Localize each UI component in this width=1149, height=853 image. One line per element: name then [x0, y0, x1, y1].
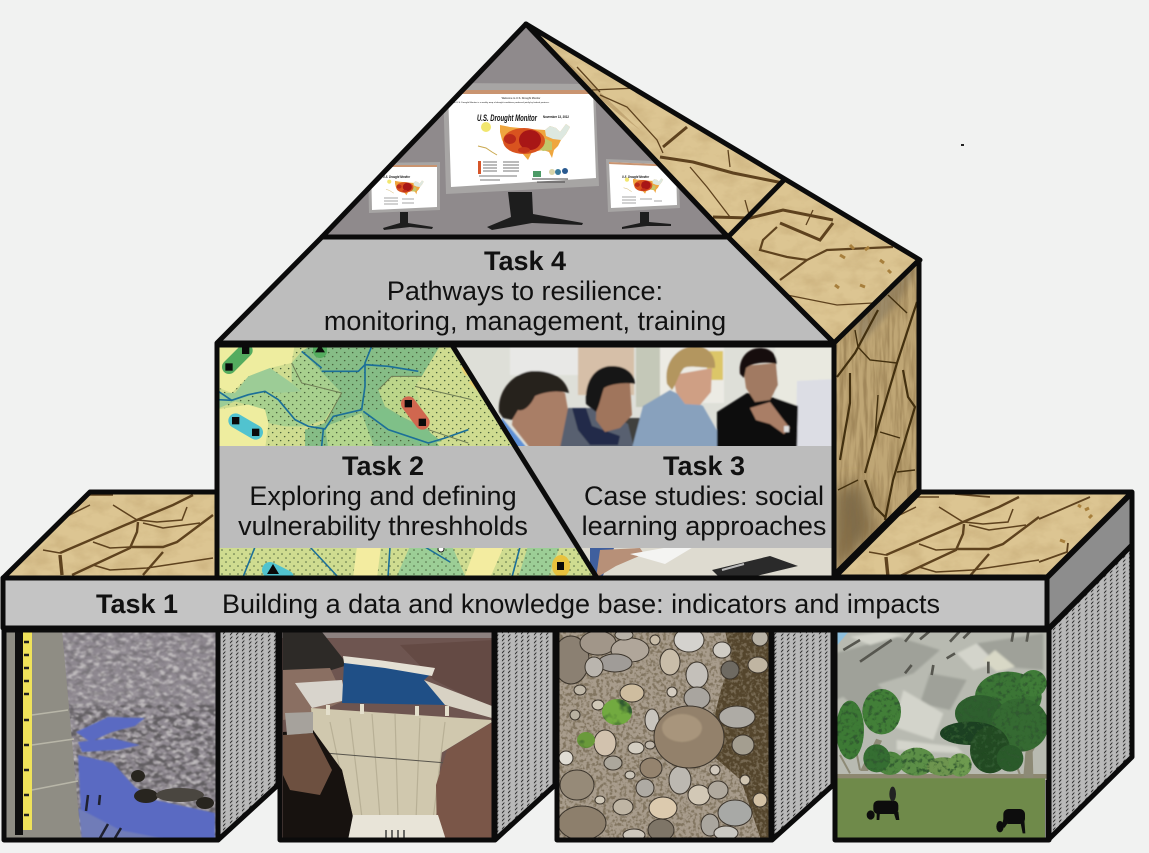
- panel: upper right slab with cracked mud: [830, 490, 1135, 580]
- panel: Task 1 beam: [3, 578, 1047, 628]
- speck: [961, 144, 964, 146]
- photo: dam and reservoir: [280, 630, 495, 840]
- big monitor: The U.S. Drought Monitor is a weekly map of drought conditions produced jointly by federal partners.: [452, 101, 550, 104]
- big monitor: Welcome to U.S. Drought Monitor: [502, 96, 540, 100]
- big monitor: November 13, 2012: [543, 114, 570, 119]
- photo: low water at river gauge: [4, 630, 220, 840]
- map lower: [220, 548, 592, 576]
- heading: Task 1: Task 1: [96, 589, 178, 619]
- heading: Task 2: Task 2: [342, 451, 424, 481]
- text: Task 3 description: learning approaches: [582, 511, 826, 541]
- right small monitor: U.S. Drought Monitor: [622, 174, 649, 179]
- text: Task 3 description: Case studies: social: [584, 481, 824, 511]
- panel: leg 1 side: [218, 630, 278, 840]
- panel: leg 3 side: [772, 630, 833, 840]
- text: Task 4 description: Pathways to resilience:: [387, 276, 663, 306]
- map upper: [220, 348, 512, 446]
- panel: leg 4 side: [1048, 545, 1132, 840]
- photo: table with booklet: [582, 548, 832, 576]
- left small monitor: [368, 162, 440, 230]
- photo: people at computer: [450, 345, 835, 450]
- photo: rocky dry streambed: [553, 628, 771, 841]
- text: Task 1 description: Building a data and knowledge base: indicators and impacts: [222, 589, 940, 619]
- text: Task 2 description: Exploring and defining: [249, 481, 517, 511]
- panel: right house wall with cracked mud: [830, 255, 922, 580]
- big monitor: [443, 83, 599, 230]
- big monitor: U.S. Drought Monitor: [477, 113, 538, 124]
- panel: Tasks 2 and 3 block: [215, 343, 835, 580]
- heading: Task 3: Task 3: [663, 451, 745, 481]
- band: Tasks 2 and 3: [218, 446, 833, 548]
- heading: Task 4: Task 4: [484, 246, 566, 276]
- panel: roof slope with cracked mud: [520, 20, 925, 350]
- photo: rangeland with cattle: [835, 630, 1049, 840]
- right small monitor: [606, 159, 680, 229]
- panel: right side of Task 1 beam: [1047, 493, 1132, 630]
- left small monitor: U.S. Drought Monitor: [383, 174, 410, 179]
- text: Task 2 description: vulnerability threshholds: [238, 511, 528, 541]
- panel: leg 2 side: [495, 630, 555, 840]
- panel: upper left slab with cracked mud: [0, 490, 220, 580]
- panel: Task 4 band: [217, 237, 834, 343]
- text: Task 4 description: monitoring, management, training: [324, 306, 726, 336]
- panel: gable with drought monitor screens: [322, 24, 728, 237]
